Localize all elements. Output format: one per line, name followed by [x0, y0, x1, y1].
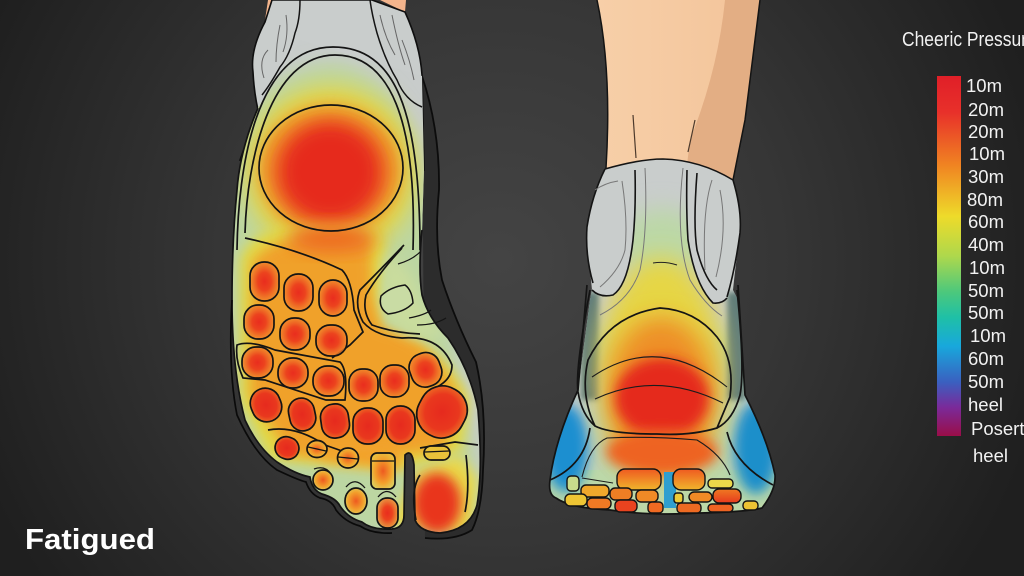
legend scale labels: 10m — [966, 75, 1002, 96]
legend scale labels: 60m — [968, 348, 1004, 369]
sock fold lines — [262, 0, 422, 107]
arch pad — [380, 285, 413, 314]
legend scale labels: Posert — [971, 418, 1024, 439]
arch wrinkles — [398, 252, 446, 325]
sock outline — [587, 159, 740, 297]
legend scale labels: 50m — [968, 280, 1004, 301]
legend colour bar — [937, 76, 961, 436]
sock panels — [587, 170, 740, 303]
ankle skin — [265, 0, 406, 20]
legend scale labels: 50m — [968, 302, 1004, 323]
heel contour lines — [550, 285, 775, 514]
toe crease lines — [308, 447, 449, 497]
legend scale labels: 60m — [968, 211, 1004, 232]
legend scale labels: heel — [968, 394, 1003, 415]
lower leg — [597, 0, 760, 180]
right foot: rear view — [540, 0, 790, 520]
condition label: Fatigued — [25, 524, 155, 556]
sole contour lines — [231, 47, 480, 533]
legend scale labels: 40m — [968, 234, 1004, 255]
sock and heel heat map — [550, 160, 774, 514]
legend scale labels: 10m — [970, 325, 1006, 346]
sock upper — [240, 0, 424, 170]
legend scale labels — [966, 75, 1024, 466]
legend scale labels: 20m — [968, 99, 1004, 120]
metatarsal and toe pads — [242, 262, 475, 528]
lateral foot side outline — [422, 76, 484, 539]
legend scale labels: 50m — [968, 371, 1004, 392]
sock crease — [653, 262, 677, 265]
pressure legend — [902, 29, 1024, 466]
heel pressure oval — [259, 105, 403, 231]
left foot: plantar pressure view — [230, 0, 485, 540]
legend scale labels: 20m — [968, 121, 1004, 142]
sole heat map — [232, 55, 480, 532]
legend scale labels: 30m — [968, 166, 1004, 187]
legend scale labels: 10m — [969, 143, 1005, 164]
heel toe-edge pads — [565, 469, 758, 513]
legend scale labels: 10m — [969, 257, 1005, 278]
legend scale labels: heel — [973, 445, 1008, 466]
legend scale labels: 80m — [967, 189, 1003, 210]
